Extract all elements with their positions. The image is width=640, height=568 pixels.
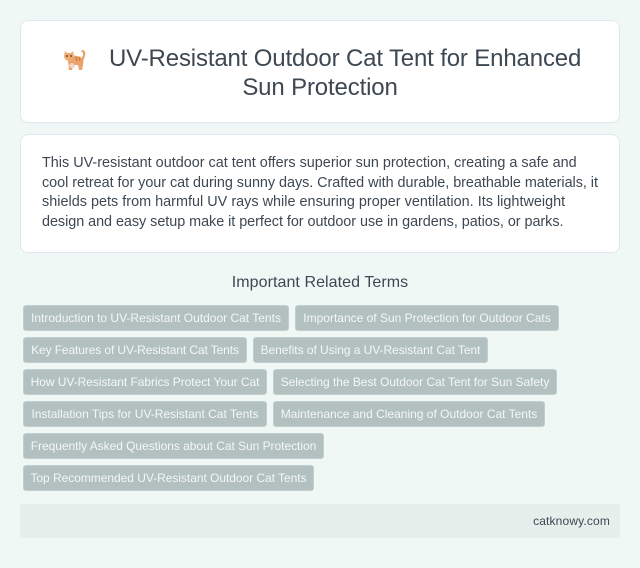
tag: Installation Tips for UV-Resistant Cat Tents	[31, 407, 259, 421]
tag: Selecting the Best Outdoor Cat Tent for Sun Safety	[281, 375, 549, 389]
title: Sun Protection	[242, 74, 398, 101]
tag: Maintenance and Cleaning of Outdoor Cat Tents	[281, 407, 537, 421]
tag	[23, 369, 267, 395]
footer	[20, 504, 620, 538]
tag	[273, 401, 545, 427]
description text: design and easy setup make it perfect for outdoor use in gardens, patios, or parks.	[42, 214, 563, 230]
description text: This UV-resistant outdoor cat tent offers superior sun protection, creating a safe and	[42, 155, 577, 171]
tag	[23, 305, 289, 331]
tag: Introduction to UV-Resistant Outdoor Cat Tents	[31, 311, 281, 325]
tag: How UV-Resistant Fabrics Protect Your Cat	[31, 375, 259, 389]
tag: Key Features of UV-Resistant Cat Tents	[31, 343, 239, 357]
tag	[273, 369, 557, 395]
tag	[23, 337, 247, 363]
icon: cat	[64, 50, 86, 70]
title card	[20, 20, 620, 123]
section heading: Important Related Terms	[232, 274, 408, 291]
tag: Frequently Asked Questions about Cat Sun Protection	[31, 439, 316, 453]
tag	[23, 465, 314, 491]
description card	[20, 134, 620, 253]
tag	[295, 305, 559, 331]
tag: Importance of Sun Protection for Outdoor Cats	[303, 311, 551, 325]
tag: Benefits of Using a UV-Resistant Cat Tent	[261, 343, 480, 357]
description text	[42, 155, 598, 230]
title: UV-Resistant Outdoor Cat Tent for Enhanced	[109, 45, 581, 72]
description text: cool retreat for your cat during sunny days. Crafted with durable, breathable materials, it	[42, 175, 598, 191]
tag list	[23, 305, 559, 491]
tag	[23, 433, 324, 459]
tag	[253, 337, 488, 363]
tag	[23, 401, 267, 427]
tag: Top Recommended UV-Resistant Outdoor Cat Tents	[30, 471, 307, 485]
description text: shields pets from harmful UV rays while ensuring proper ventilation. Its lightweight	[42, 194, 565, 210]
site name: catknowy.com	[533, 514, 610, 528]
title	[109, 45, 581, 101]
